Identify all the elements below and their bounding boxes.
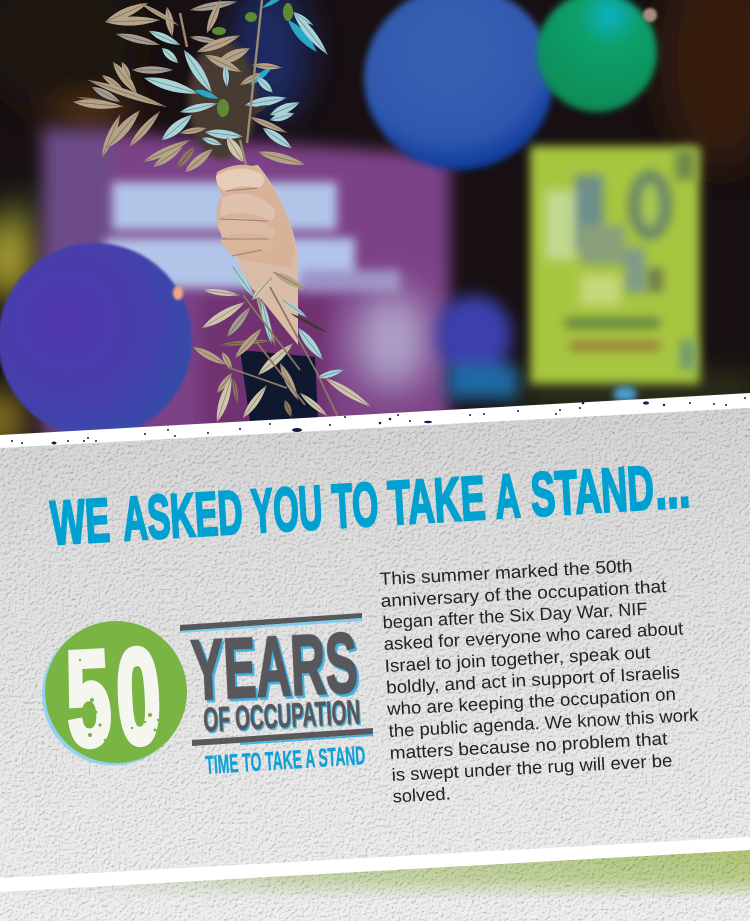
lower rule (192, 728, 373, 746)
white strip bottom (0, 837, 750, 892)
green balloon (537, 0, 657, 112)
purple balloon (0, 243, 192, 437)
ink speckles on strip (11, 397, 746, 444)
blurred event backdrop (0, 0, 750, 445)
body text: This summer marked the 50th (379, 556, 633, 589)
blue balloon top (364, 0, 554, 170)
YEARS: YEARS (189, 616, 360, 718)
body text: the public agenda. We know this work (388, 705, 699, 741)
body text: boldly, and act in support of Israelis (386, 662, 680, 697)
photo background (0, 0, 750, 440)
body text: matters because no problem that (389, 728, 668, 763)
white torn strip top (0, 393, 750, 448)
body text (379, 556, 699, 806)
headline: ASKED (121, 478, 244, 554)
OF OCCUPATION: OF OCCUPATION (202, 693, 361, 739)
headline: YOU (249, 474, 324, 547)
olive fruits (212, 3, 293, 117)
textured paper panel (0, 408, 750, 921)
dark foliage mass (188, 40, 256, 160)
body text: who are keeping the occupation on (386, 684, 676, 719)
body text: solved. (392, 783, 451, 806)
headline: WE (49, 486, 112, 559)
body text: asked for everyone who cared about (383, 618, 684, 654)
number 50: 5 (63, 622, 114, 775)
small blue glow (613, 386, 637, 402)
blue balloon lower (436, 295, 518, 399)
olive leaves upper (73, 0, 331, 175)
blurred banner lettering (105, 182, 400, 292)
olive leaves lower (191, 265, 373, 423)
green wash at bottom (66, 850, 750, 898)
speckles on 50 (79, 659, 161, 741)
lower rule shadow (240, 734, 373, 745)
body text: began after the Six Day War. NIF (382, 599, 648, 632)
tagline: TIME TO TAKE A STAND (204, 740, 366, 780)
pale banner detail (354, 290, 430, 390)
yellow-green sign (530, 146, 700, 384)
blurred purple banner (42, 128, 450, 440)
headline: ... (653, 452, 692, 523)
number 50: 0 (113, 620, 164, 773)
headline (49, 452, 692, 559)
headline: A (493, 462, 522, 532)
photo: hand holding olive branch (0, 0, 750, 445)
balloon highlight (643, 8, 657, 22)
body text: Israel to join together, speak out (384, 642, 651, 676)
headline: TAKE (386, 464, 487, 538)
rule shadow (180, 618, 362, 633)
headline: STAND (529, 454, 656, 530)
sleeve (240, 350, 318, 422)
green circle badge (42, 621, 187, 766)
arm and hand (216, 165, 298, 345)
body text: is swept under the rug will ever be (391, 750, 673, 785)
body text: anniversary of the occupation that (380, 576, 667, 611)
logo: 50 years of occupation (42, 613, 373, 780)
light spot (173, 286, 183, 300)
olive branch stems (180, 0, 262, 165)
headline: TO (330, 470, 380, 542)
lower stems (227, 287, 338, 417)
top rule (180, 613, 362, 631)
